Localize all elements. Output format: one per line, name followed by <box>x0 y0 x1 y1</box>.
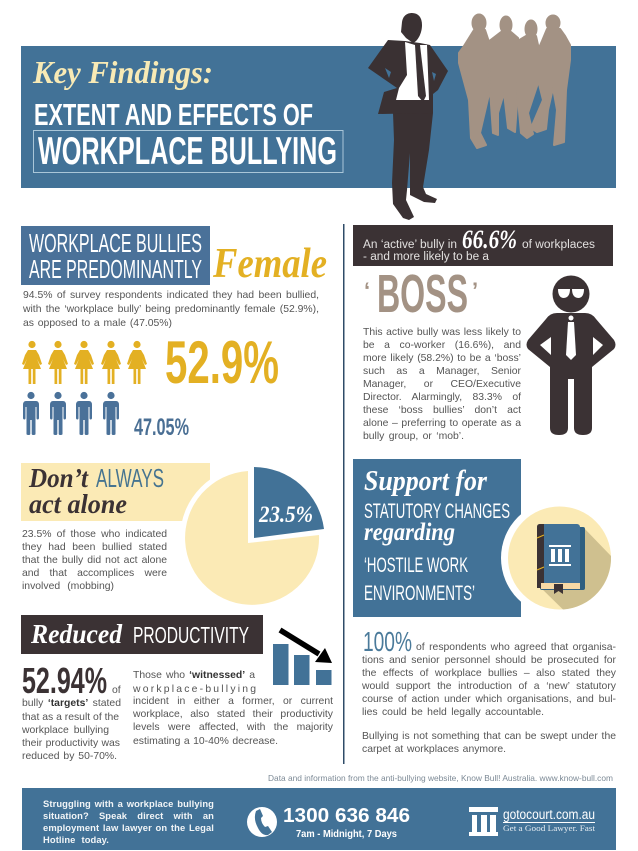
body text: targets: workplace bullying <box>22 725 109 736</box>
chart icon: falling bars <box>273 630 332 685</box>
panel: 100% of respondents <box>362 626 620 758</box>
heading box: regarding <box>364 519 455 546</box>
heading box: ENVIRONMENTS’ <box>364 582 475 605</box>
body text: such as a Manager, Senior <box>363 366 521 377</box>
divider <box>343 224 344 764</box>
body text <box>362 641 620 758</box>
heading box: ARE PREDOMINANTLY <box>29 254 202 284</box>
body text: as opposed to a male (47.05%) <box>23 318 172 329</box>
icon: law book <box>501 500 617 616</box>
banner: active bully <box>353 225 613 266</box>
body text: would support the introduction of a ‘new’ statutory <box>362 681 616 692</box>
body text: tions and senior personnel should be prosecuted for <box>362 655 616 666</box>
banner: active bully: An ‘active’ bully in <box>363 239 457 251</box>
heading: boss: ’ <box>472 278 478 303</box>
heading box: ‘HOSTILE WORK <box>364 554 468 577</box>
banner: active bully: of workplaces <box>522 239 595 251</box>
body text <box>22 528 172 594</box>
body text: bully group, or ‘mob’. <box>363 431 464 442</box>
pie chart: 23.5% <box>258 502 313 527</box>
banner: active bully: 66.6% <box>462 225 517 254</box>
heading: extent and effects of: EXTENT AND EFFECTS OF <box>34 97 313 132</box>
footer <box>22 788 616 850</box>
heading text: act alone <box>29 489 127 519</box>
icons: women <box>22 341 147 384</box>
pie chart <box>180 466 324 610</box>
heading: boss: ‘ <box>364 278 370 303</box>
logo text <box>503 807 596 833</box>
heading text: ALWAYS <box>96 463 164 493</box>
header banner <box>21 46 616 188</box>
heading box: Support for <box>364 466 488 497</box>
body text: lies could be held legally accountable. <box>362 707 544 718</box>
body text: witnessed: workplace-bullying <box>132 684 256 695</box>
footer text: situation? Speak direct with an <box>43 810 214 821</box>
icon: phone <box>247 807 277 837</box>
heading box <box>353 459 521 617</box>
body text: Manager, or CEO/Executive <box>363 379 521 390</box>
body text: targets <box>22 697 126 765</box>
body text: targets: reduced by 50-70%. <box>22 751 117 762</box>
body text: carpet at workplaces anymore. <box>362 744 506 755</box>
heading: boss: BOSS <box>377 264 468 324</box>
footer text: Hotline today. <box>43 834 109 845</box>
heading: female: Female <box>212 241 327 287</box>
body text: witnessed: estimating a 10-40% decrease. <box>133 736 278 747</box>
body text <box>23 289 323 333</box>
body text: more likely (58.2%) to be a ‘boss’ <box>363 353 521 364</box>
icon: courthouse columns <box>469 807 498 836</box>
body text: the effects of workplace bullies – also stated they <box>362 668 616 679</box>
footer text: Struggling with a workplace bullying <box>43 798 214 809</box>
heading text: Don’t <box>28 463 89 493</box>
body text: with the ‘workplace bully’ being predominantly female (52.9%), <box>23 304 319 315</box>
body text: 94.5% of survey respondents indicated they had been bullied, <box>23 290 319 301</box>
body text: witnessed: workplace, also stated their productivity <box>133 709 333 720</box>
heading band <box>21 463 210 521</box>
footer text <box>43 798 223 846</box>
panel: support for statutory changes <box>353 459 617 617</box>
body text: involved (mobbing) <box>22 581 114 592</box>
body text: these ‘boss bullies’ don’t act <box>363 405 521 416</box>
logo text: Get a Good Lawyer. Fast <box>503 824 596 833</box>
body text <box>363 326 525 444</box>
heading box: PRODUCTIVITY <box>133 622 249 648</box>
stat: 47.05%: 47.05% <box>134 414 189 441</box>
body text: targets: their productivity was <box>22 738 120 749</box>
body text: witnessed: incident in either a former, or current <box>133 696 333 707</box>
icon: boss with sunglasses <box>526 276 616 435</box>
panel: predominantly female <box>21 226 327 441</box>
body text: targets: bully ‘targets’ stated <box>22 698 121 709</box>
heading box <box>21 226 210 285</box>
heading box <box>21 615 263 654</box>
body text: targets: that as a result of the <box>22 712 119 723</box>
heading text <box>28 463 164 519</box>
heading box: WORKPLACE BULLIES <box>29 228 202 258</box>
panel: don't always act alone <box>21 463 324 610</box>
stat: 52.94%: of <box>112 685 121 696</box>
body text: This active bully was less likely to <box>363 327 521 338</box>
body text: Bullying is not something that can be swept under the <box>362 731 616 742</box>
footer text: employment law lawyer on the Legal <box>43 822 214 833</box>
heading box: STATUTORY CHANGES <box>364 500 510 523</box>
body text: of respondents who agreed that organisa- <box>416 642 616 653</box>
body text: Director. Alarmingly, 83.3% of <box>363 392 521 403</box>
stat: 52.9%: 52.9% <box>165 329 279 396</box>
illustration: group of silhouettes <box>459 14 570 148</box>
panel: boss <box>353 225 616 444</box>
body text: witnessed: Those who ‘witnessed’ a <box>133 670 255 681</box>
body text: that the bully did not act alone <box>22 555 167 566</box>
body text: and that accomplices were <box>22 568 167 579</box>
body text: alone – preferring to operate as a <box>363 418 521 429</box>
stat: 100%: 100% <box>363 626 412 657</box>
hotline number: 1300 636 846 <box>283 805 410 827</box>
body text: witnessed <box>132 669 337 751</box>
heading: key findings: Key Findings: <box>32 54 213 90</box>
illustration: foreground bully in suit <box>368 13 448 220</box>
body text: course of action under which organisations, and bul- <box>362 694 616 705</box>
heading: boss <box>364 264 478 324</box>
stat: 52.94%: 52.94% <box>22 660 107 701</box>
heading box: Reduced <box>30 619 122 649</box>
heading: workplace bullying: WORKPLACE BULLYING <box>38 130 337 173</box>
panel: reduced productivity <box>21 615 337 765</box>
body text: they had been bullied stated <box>22 542 167 553</box>
body text: be a co-worker (16.6%), and <box>363 340 521 351</box>
body text: 23.5% of those who indicated <box>22 529 167 540</box>
banner: active bully: - and more likely to be a <box>363 251 490 263</box>
logo text: gotocourt.com.au <box>503 807 595 822</box>
icons: men <box>23 392 119 435</box>
hotline hours: 7am - Midnight, 7 Days <box>296 829 397 840</box>
body text: witnessed: levels were affected, with the majority <box>133 722 333 733</box>
source note: Data and information from the anti-bullying website, Know Bull! Australia. www.know-bull.com <box>268 774 613 783</box>
heading: workplace bullying <box>34 130 343 173</box>
